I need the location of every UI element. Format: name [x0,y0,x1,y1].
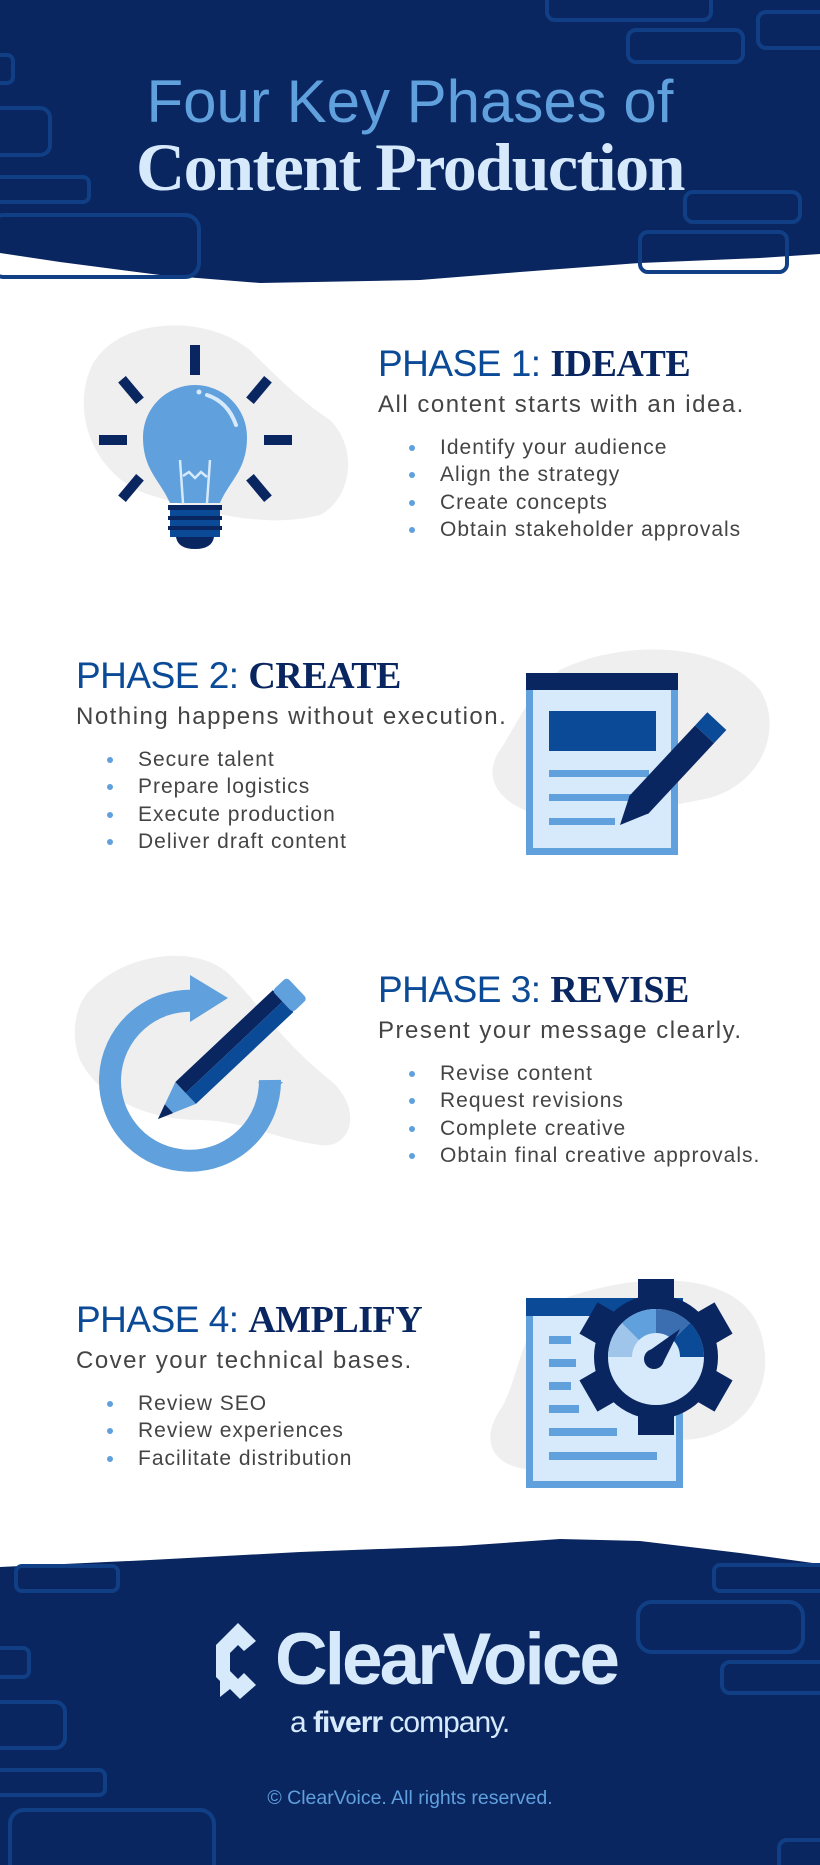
panel: phase 3 [75,956,760,1172]
icon: revise cycle pencil [75,956,350,1172]
list: phase 4 bullets [107,1392,352,1470]
list: phase 4 bullets: Review SEO [138,1392,267,1415]
text: fiverr tagline: a fiverr company. [290,1706,509,1739]
panel: phase 2 [76,650,770,855]
list: phase 1 bullets: Obtain stakeholder approvals [440,518,741,541]
header background [0,0,820,283]
list: phase 3 bullets: Request revisions [440,1089,624,1112]
list: phase 2 bullets: Execute production [138,803,336,826]
list: phase 2 bullets: Secure talent [138,748,275,771]
panel: phase 4 [76,1279,765,1488]
text: phase 4 subtitle: Cover your technical bases. [76,1347,413,1374]
text: copyright: © ClearVoice. All rights reserved. [267,1787,553,1809]
panel: phase 1 [84,326,745,549]
heading: phase 3: PHASE 3: REVISE [378,969,689,1011]
title [136,68,684,205]
list: phase 2 bullets: Prepare logistics [138,775,310,798]
list: phase 3 bullets: Complete creative [440,1117,626,1140]
icon: document with pencil [492,650,770,855]
text: phase 2 subtitle: Nothing happens without execution. [76,703,507,730]
icon: document with gear gauge [490,1279,765,1488]
text: phase 3 subtitle: Present your message clearly. [378,1017,743,1044]
heading: phase 1: PHASE 1: IDEATE [378,343,690,385]
logo: ClearVoice [216,1619,618,1739]
list: phase 4 bullets: Review experiences [138,1419,344,1442]
text: phase 1 subtitle: All content starts with an idea. [378,391,745,418]
heading: phase 4: PHASE 4: AMPLIFY [76,1299,422,1341]
heading: phase 2: PHASE 2: CREATE [76,655,401,697]
list: phase 3 bullets: Obtain final creative approvals. [440,1144,760,1167]
footer background [0,1539,820,1865]
list: phase 1 bullets: Identify your audience [440,436,667,459]
list: phase 1 bullets: Align the strategy [440,463,620,486]
list: phase 2 bullets: Deliver draft content [138,830,347,853]
list: phase 3 bullets [409,1062,760,1167]
list: phase 4 bullets: Facilitate distribution [138,1447,352,1470]
list: phase 1 bullets: Create concepts [440,491,608,514]
title: Content Production [136,129,684,205]
title: Four Key Phases of [147,68,673,135]
list: phase 2 bullets [107,748,347,853]
list: phase 3 bullets: Revise content [440,1062,593,1085]
icon: light bulb [84,326,348,549]
list: phase 1 bullets [409,436,741,541]
logo: ClearVoice: ClearVoice [275,1619,617,1700]
icon: ClearVoice mark [216,1623,256,1699]
